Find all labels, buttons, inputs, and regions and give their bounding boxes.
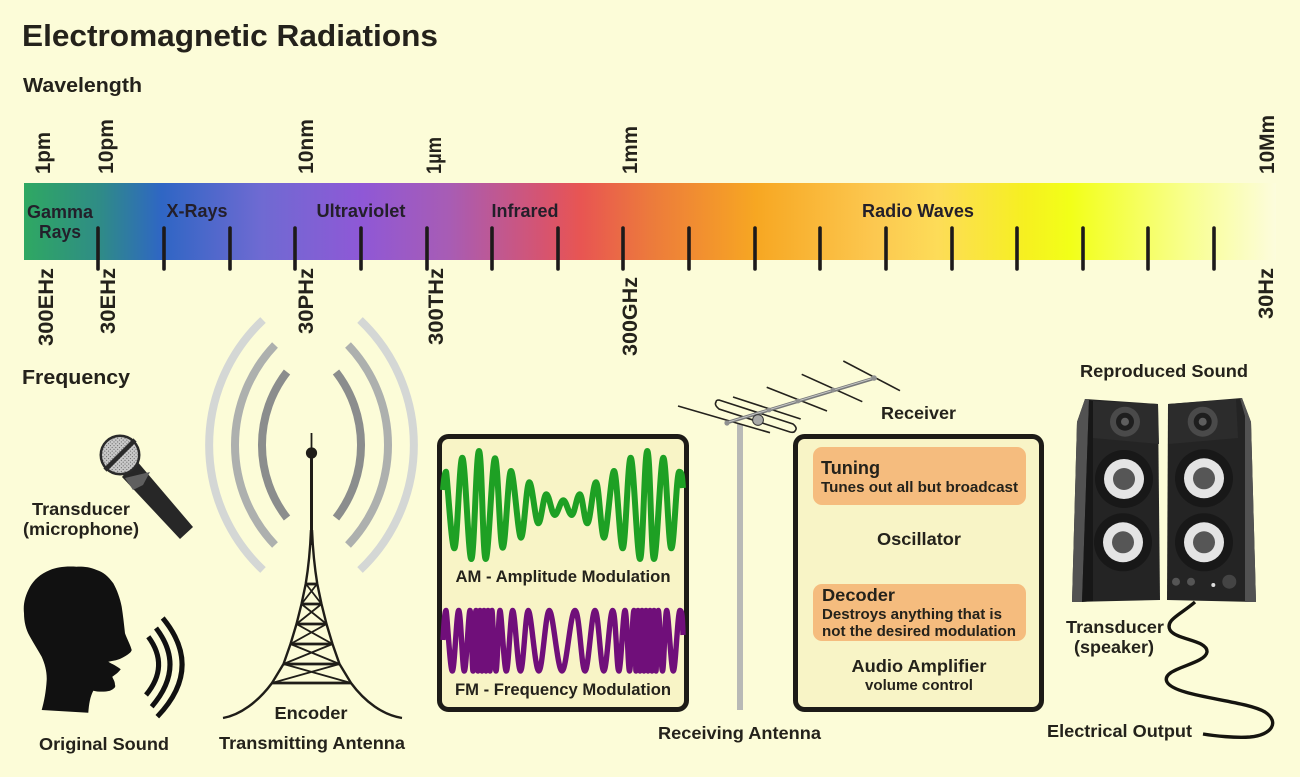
spectrum band labels: X-Rays — [166, 201, 228, 221]
label: electrical output: Electrical Output — [1047, 721, 1192, 741]
icon: speaker cable — [1166, 602, 1273, 737]
label: transducer speaker: Transducer — [1066, 617, 1164, 637]
label: AM: AM - Amplitude Modulation — [456, 567, 670, 586]
frequency scale labels: 300GHz — [619, 277, 642, 356]
label: transducer microphone: Transducer — [32, 499, 130, 519]
label: transducer microphone: (microphone) — [23, 519, 139, 539]
chart: FM wave — [443, 610, 683, 671]
spectrum band labels: Rays — [39, 222, 81, 242]
wavelength scale labels — [32, 115, 1279, 174]
frequency scale labels: 30Hz — [1255, 268, 1278, 319]
panel: receiver — [796, 436, 1042, 710]
panel: modulation — [440, 436, 686, 710]
frequency scale labels: 30EHz — [97, 268, 120, 334]
label: audio amplifier: volume control — [865, 678, 973, 694]
label: transmitting antenna: Transmitting Antenna — [219, 733, 405, 753]
spectrum band labels: Infrared — [492, 201, 558, 221]
icon: radio wave arcs — [209, 320, 414, 570]
wavelength scale labels: 1µm — [423, 137, 446, 174]
spectrum band labels: Gamma — [27, 202, 94, 222]
spectrum tick marks — [98, 228, 1214, 269]
block: decoder: Decoder — [822, 585, 895, 605]
block: tuning: Tunes out all but broadcast — [821, 480, 1018, 496]
icon: sound waves from mouth — [146, 618, 182, 717]
icon: microphone — [100, 434, 193, 539]
frequency scale labels: 300EHz — [35, 268, 58, 346]
label: audio amplifier: Audio Amplifier — [852, 656, 987, 676]
label: transducer microphone — [23, 499, 139, 539]
spectrum bar — [24, 183, 1276, 269]
icon: right speaker — [1167, 398, 1256, 602]
label: transducer speaker: (speaker) — [1074, 637, 1154, 657]
heading: frequency: Frequency — [22, 367, 131, 389]
wavelength scale labels: 10Mm — [1256, 115, 1279, 174]
spectrum band labels — [27, 201, 974, 242]
chart: AM wave — [443, 451, 683, 559]
label: reproduced sound: Reproduced Sound — [1080, 361, 1248, 381]
block: tuning — [813, 447, 1026, 505]
icon: left speaker — [1072, 399, 1160, 602]
label: original sound: Original Sound — [39, 734, 169, 754]
icon: speaking head — [24, 566, 132, 713]
spectrum band labels: Radio Waves — [862, 201, 974, 221]
label: FM: FM - Frequency Modulation — [455, 680, 671, 699]
wavelength scale labels: 10pm — [95, 119, 118, 174]
label: audio amplifier — [852, 656, 987, 694]
label: oscillator: Oscillator — [877, 529, 961, 549]
block: tuning: Tuning — [821, 458, 880, 478]
label: encoder: Encoder — [274, 703, 348, 723]
label: transducer speaker — [1066, 617, 1164, 657]
spectrum band labels: Ultraviolet — [316, 201, 406, 221]
wavelength scale labels: 1pm — [32, 132, 55, 174]
wavelength scale labels: 10nm — [295, 119, 318, 174]
heading: wavelength: Wavelength — [23, 74, 142, 97]
block: decoder: Destroys anything that is — [822, 607, 1002, 623]
block: decoder: not the desired modulation — [822, 624, 1016, 640]
icon: transmitting tower — [223, 433, 402, 718]
frequency scale labels — [35, 268, 1278, 356]
label: receiver: Receiver — [881, 403, 956, 423]
block: decoder — [813, 584, 1026, 641]
frequency scale labels: 30PHz — [295, 268, 318, 334]
icon: receiving antenna — [678, 361, 900, 710]
wavelength scale labels: 1mm — [619, 126, 642, 174]
label: receiving antenna: Receiving Antenna — [658, 723, 821, 743]
frequency scale labels: 300THz — [425, 268, 448, 345]
title: Electromagnetic Radiations — [22, 18, 438, 53]
